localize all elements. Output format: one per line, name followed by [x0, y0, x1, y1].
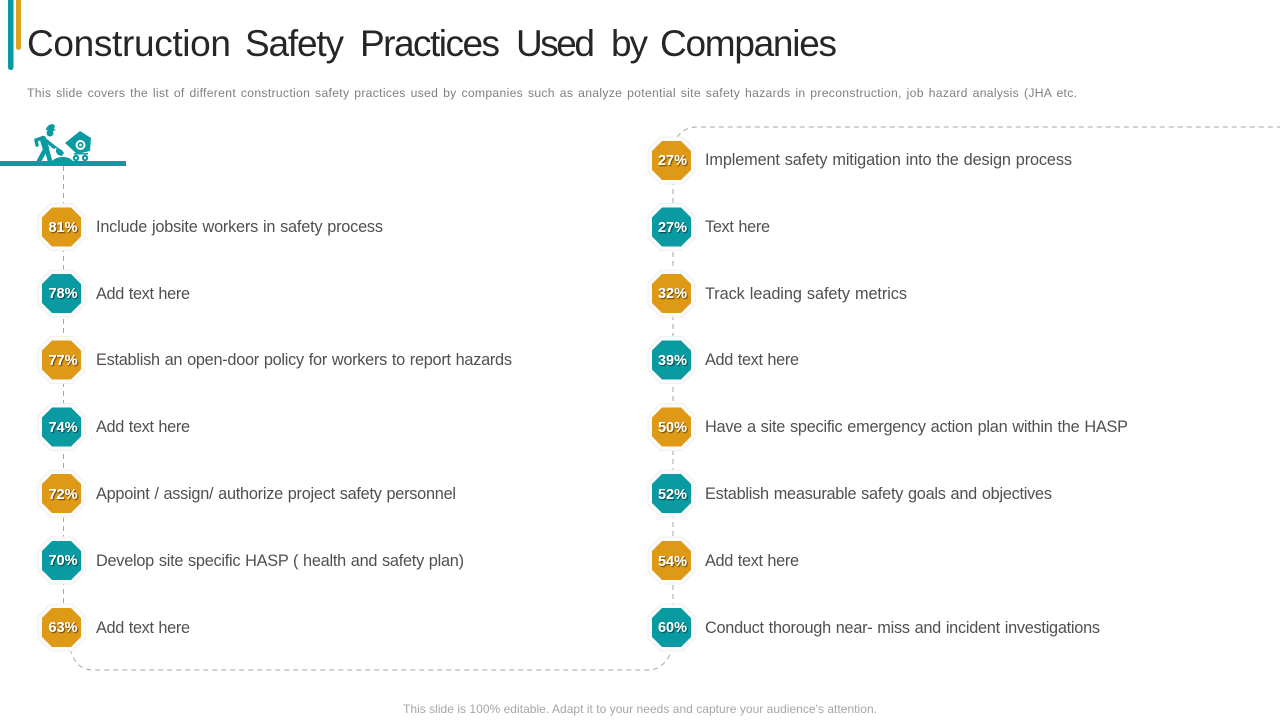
row: 39%: Add text here [705, 351, 799, 369]
row: 70% [38, 537, 464, 584]
row: 27% design process: 27% [658, 153, 687, 169]
row: 27% design process [648, 137, 1072, 184]
row: 32%: 32% [658, 286, 687, 302]
row: 54% [648, 537, 799, 584]
row: 63%: Add text here [96, 619, 190, 637]
row: 52%: Establish measurable safety goals and objectives [705, 485, 1052, 503]
title: Practices [360, 23, 500, 64]
title: Companies [660, 23, 837, 64]
row: 27% text here: 27% [658, 220, 687, 236]
row: 32% [648, 270, 907, 317]
row: 63%: 63% [48, 620, 78, 636]
title: Safety [245, 23, 344, 64]
row: 74%: Add text here [96, 418, 190, 436]
row: 74% [38, 404, 190, 450]
row: 74%: 74% [48, 420, 78, 436]
icon: construction worker with mixer [0, 124, 126, 166]
row: 77% [38, 336, 512, 384]
row: 70%: 70% [48, 553, 78, 569]
accent bars [8, 0, 21, 70]
row: 39% [648, 336, 799, 384]
row: 77%: Establish an open-door policy for workers to report hazards [96, 351, 512, 369]
row: 72%: 72% [48, 487, 78, 503]
row: 70%: Develop site specific HASP ( health and safety plan) [96, 552, 464, 570]
row: 39%: 39% [658, 353, 687, 369]
row: 27% text here: Text here [705, 218, 770, 236]
row: 72%: Appoint / assign/ authorize project safety personnel [96, 485, 456, 503]
row: 50%: Have a site specific emergency action plan within the HASP [705, 418, 1128, 436]
title: by [611, 23, 648, 64]
row: 72% [38, 470, 456, 517]
row: 81%: Include jobsite workers in safety process [96, 218, 383, 236]
row: 78% [38, 270, 190, 317]
dashed connector line [64, 127, 1280, 670]
row: 60%: 60% [658, 620, 687, 636]
title: Used [516, 23, 595, 64]
row: 32%: Track leading safety metrics [705, 285, 907, 303]
row: 81% [38, 204, 383, 250]
row: 50% [648, 404, 1128, 450]
row: 27% text here [648, 204, 770, 250]
row: 63% [38, 604, 190, 651]
row: 52%: 52% [658, 487, 687, 503]
row: 60% [648, 604, 1100, 651]
title: Construction [27, 23, 231, 64]
row: 81%: 81% [48, 220, 78, 236]
subtitle: This slide covers the list of different construction safety practices used by companies such as analyze potential site safety hazards in preconstruction, job hazard analysis (JHA etc. [27, 86, 1077, 100]
row: 27% design process: Implement safety mitigation into the design process [705, 151, 1072, 169]
row: 78%: Add text here [96, 285, 190, 303]
row: 50%: 50% [658, 420, 687, 436]
footer note: This slide is 100% editable. Adapt it to your needs and capture your audience's attention. [403, 702, 877, 716]
row: 60%: Conduct thorough near- miss and incident investigations [705, 619, 1100, 637]
row: 54%: 54% [658, 554, 687, 570]
row: 54%: Add text here [705, 552, 799, 570]
row: 78%: 78% [48, 286, 78, 302]
row: 77%: 77% [48, 353, 78, 369]
row: 52% [648, 470, 1052, 517]
